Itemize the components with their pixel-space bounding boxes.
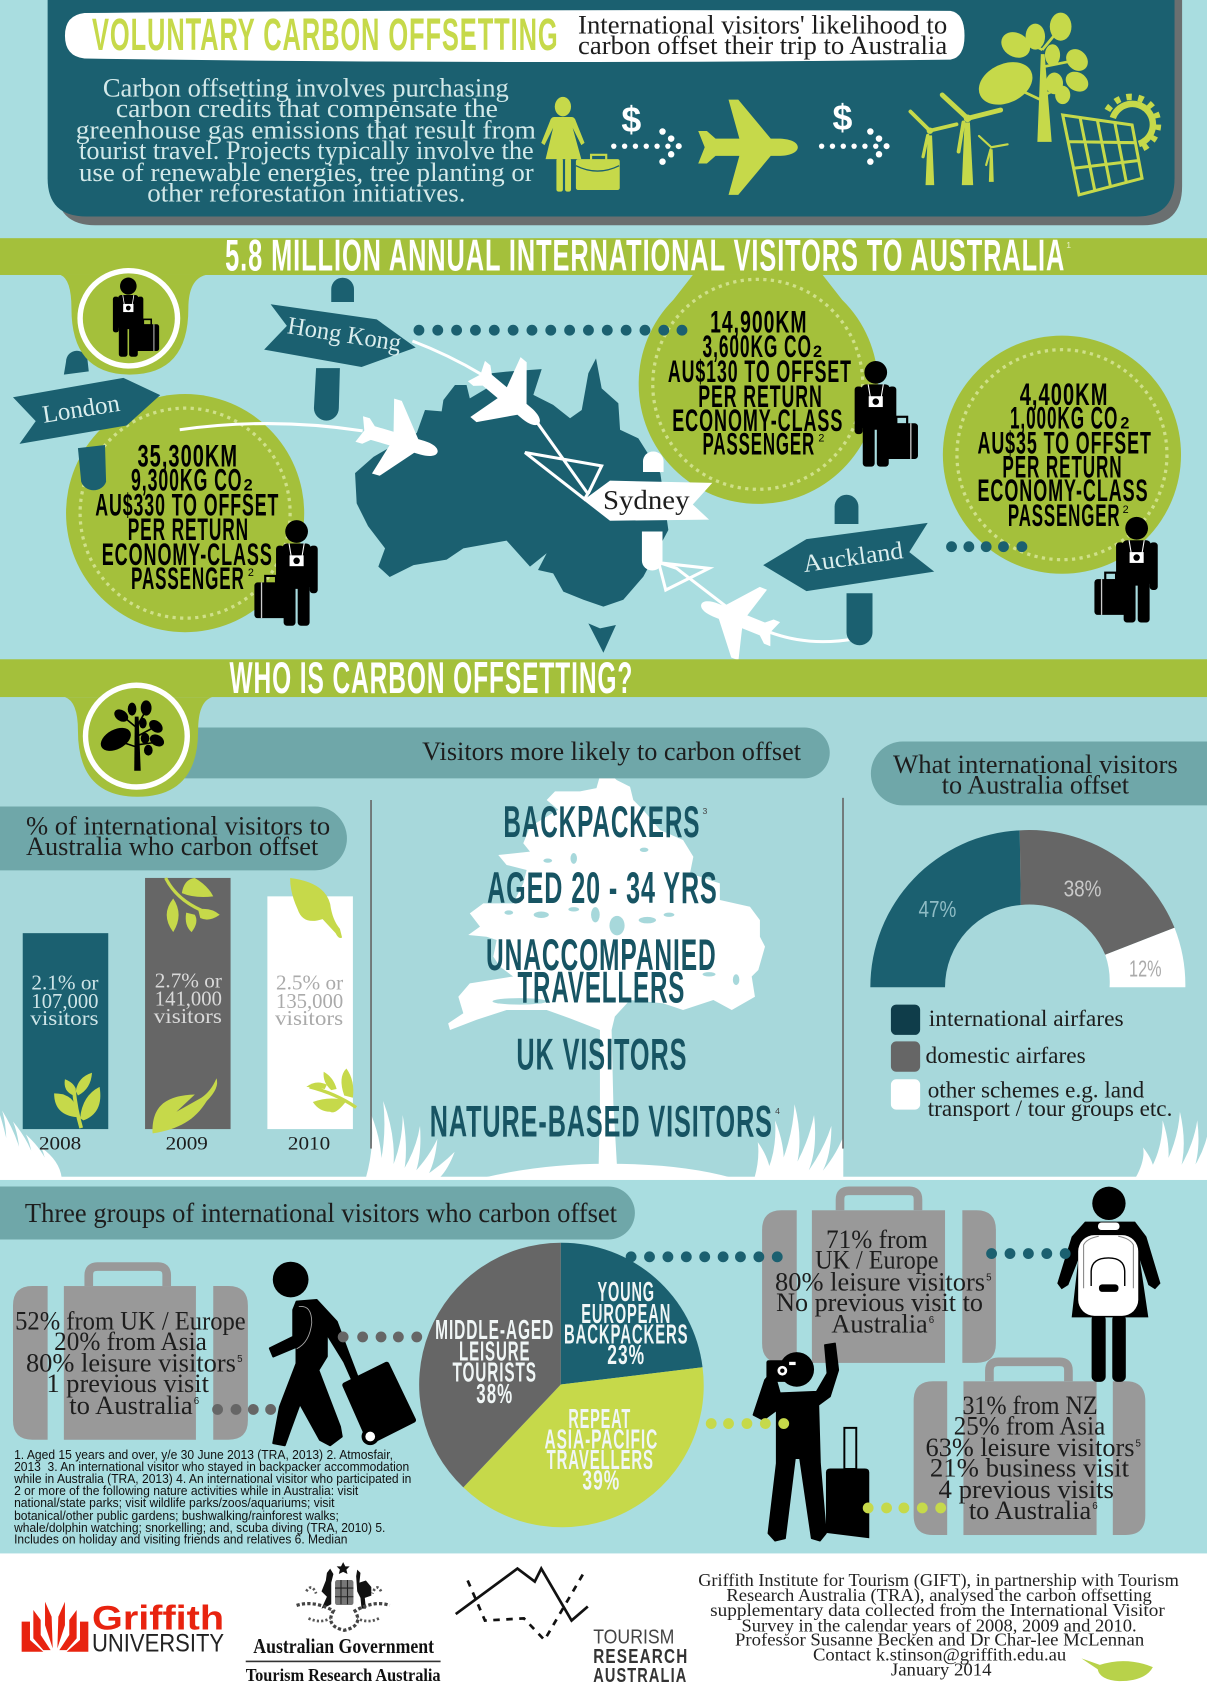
footnotes: botanical/other public gardens; bushwalking/rainforest walks; [14, 1509, 339, 1523]
credits text: Research Australia (TRA), analysed the carbon offsetting [726, 1585, 1152, 1606]
icon: plane [698, 100, 798, 195]
circle: Auckland stats: 1,000KG CO [1010, 401, 1118, 436]
year labels [39, 1134, 330, 1155]
suitcase: young European backpackers: 5 [986, 1273, 992, 1284]
dotted link: Auckland [946, 541, 1027, 552]
circle: Hong Kong stats: 3,600KG CO [703, 329, 812, 364]
footnotes: 2 or more of the following nature activities while in Australia: visit [14, 1484, 359, 1498]
credits text: Griffith Institute for Tourism (GIFT), in partnership with Tourism [698, 1570, 1180, 1591]
heading: who is offsetting: WHO IS CARBON OFFSETTING? [229, 654, 633, 703]
suitcase: repeat Asia-Pacific travellers: 5 [1136, 1438, 1141, 1449]
suitcase: young European backpackers: 71% from [826, 1225, 928, 1254]
circle: London stats: PER RETURN [128, 512, 249, 547]
circle: Auckland stats: 4,400KM [1020, 377, 1108, 412]
donut legend: transport / tour groups etc. [928, 1096, 1172, 1121]
circle: Hong Kong stats: 2 [813, 343, 824, 361]
icon: solar panel [1063, 115, 1142, 195]
suitcase: young European backpackers: 6 [929, 1315, 934, 1326]
pill: what visitors offset: What international visitors [893, 750, 1178, 779]
suitcase: middle-aged leisure tourists: 1 previous visit [47, 1369, 210, 1398]
logo: Australian Government: Australian Government [253, 1636, 434, 1658]
credits text: January 2014 [891, 1660, 992, 1680]
pie chart: three visitor groups: TRAVELLERS [547, 1444, 654, 1475]
suitcase: repeat Asia-Pacific travellers: 6 [1092, 1501, 1098, 1512]
figure: walker with wheeled case [270, 1262, 413, 1445]
pie chart: three visitor groups: MIDDLE-AGED [435, 1314, 554, 1345]
icon: dollar transfer two [819, 98, 890, 165]
semi-donut chart: what is offset: 12% [1129, 955, 1162, 981]
logo: Tourism Research Australia [456, 1569, 688, 1687]
icon: sun [1107, 97, 1158, 149]
year labels: 2010 [288, 1134, 330, 1155]
bar: 2009: visitors [154, 1006, 222, 1028]
bar: 2008: 2.1% or [31, 972, 99, 994]
intro paragraph: carbon credits that compensate the [116, 94, 498, 123]
tourist: Hong Kong [855, 361, 918, 467]
suitcase: middle-aged leisure tourists: 80% leisure visitors [26, 1349, 236, 1378]
circle: Auckland stats: 2 [1120, 415, 1131, 433]
donut legend: international airfares [929, 1006, 1124, 1031]
suitcase: young European backpackers: No previous visit to [776, 1288, 983, 1317]
circle: Hong Kong stats: 14,900KM [710, 304, 808, 339]
credits text: Contact k.stinson@griffith.edu.au [813, 1645, 1066, 1665]
map of Australia [355, 358, 668, 653]
pill: what visitors offset: to Australia offset [942, 771, 1130, 800]
logo: Tourism Research Australia: AUSTRALIA [593, 1664, 687, 1687]
pill: visitors more likely [162, 727, 830, 778]
pie chart: three visitor groups: TOURISTS [452, 1356, 537, 1387]
circle: Hong Kong stats: 2 [818, 433, 826, 445]
footnotes: 1. Aged 15 years and over, y/e 30 June 2013 (TRA, 2013) 2. Atmosfair, [14, 1448, 393, 1462]
list: visitors more likely: UK VISITORS [516, 1031, 687, 1080]
bar: 2008: visitors [30, 1008, 99, 1030]
circle: London stats: PASSENGER [131, 561, 245, 596]
figure: backpacker [1057, 1187, 1160, 1382]
suitcase: young European backpackers [762, 1191, 996, 1363]
pill: percent of visitors: % of international visitors to [26, 812, 330, 841]
circle: London stats: AU$330 TO OFFSET [95, 487, 279, 522]
footnotes [13, 1448, 411, 1547]
circle: Hong Kong stats: ECONOMY-CLASS [672, 403, 843, 438]
credits text: Survey in the calendar years of 2008, 2009 and 2010. [742, 1615, 1137, 1635]
logo: Griffith University: Griffith [92, 1600, 224, 1638]
footnotes: while in Australia (TRA, 2013) 4. An international visitor who participated in [13, 1472, 411, 1486]
intro paragraph: other reforestation initiatives. [147, 178, 465, 207]
pill: three groups: Three groups of international visitors who carbon offset [25, 1198, 617, 1228]
icon: footer leaf [1081, 1658, 1153, 1681]
suitcase: middle-aged leisure tourists: 5 [237, 1354, 242, 1365]
list: visitors more likely: UNACCOMPANIED [486, 931, 717, 980]
signpost: London: London [40, 390, 122, 429]
plane: Auckland route [687, 569, 789, 669]
pill: percent of visitors [0, 806, 347, 870]
logo: Australian Government [246, 1562, 441, 1685]
circle: London stats: 2 [248, 567, 256, 579]
list: visitors more likely: BACKPACKERS [503, 798, 700, 847]
grass tufts [0, 1101, 1207, 1178]
credits text: Professor Susanne Becken and Dr Char-lee McLennan [735, 1629, 1144, 1649]
footnotes: Includes on holiday and visiting friends and relatives 6. Median [14, 1533, 348, 1547]
signpost: Auckland: Auckland [801, 537, 905, 578]
signpost: Hong Kong: Hong Kong [286, 312, 403, 357]
circle: Hong Kong stats: AU$130 TO OFFSET [668, 354, 852, 389]
signpost: Hong Kong [264, 278, 416, 421]
logo: Tourism Research Australia: TOURISM [593, 1625, 674, 1648]
circle: Hong Kong stats: PASSENGER [703, 427, 815, 462]
main title: VOLUNTARY CARBON OFFSETTING [92, 9, 559, 60]
pill: visitors more likely: Visitors more likely to carbon offset [422, 737, 802, 766]
bar: 2010: 2.5% or [276, 972, 343, 994]
icon: lime tree [972, 13, 1092, 142]
circle: Hong Kong stats [639, 275, 878, 504]
list: visitors more likely [430, 798, 782, 1147]
pie chart: three visitor groups: REPEAT [568, 1403, 631, 1434]
circle: London stats: 9,300KG CO [131, 462, 242, 497]
bar: 2009: 2.7% or [155, 970, 222, 992]
banner: annual visitors [0, 232, 1207, 281]
pie chart: three visitor groups: ASIA-PACIFIC [545, 1423, 658, 1454]
donut legend [891, 1005, 1172, 1121]
header pill [65, 10, 965, 62]
logo: Australian Government: Tourism Research Australia [246, 1665, 441, 1685]
white divider [0, 1177, 1207, 1180]
suitcase: young European backpackers: UK / Europe [815, 1246, 939, 1275]
semi-donut chart: what is offset: 38% [1064, 875, 1101, 901]
divider lines [370, 798, 844, 1149]
suitcase: repeat Asia-Pacific travellers: 4 previous visits [939, 1475, 1114, 1504]
suitcase: repeat Asia-Pacific travellers [914, 1362, 1145, 1535]
credits text [698, 1570, 1180, 1680]
icon: crest [297, 1562, 390, 1630]
footnotes: whale/dolphin watching; snorkelling; and, scuba diving (TRA, 2010) 5. [13, 1521, 385, 1535]
pill: percent of visitors: Australia who carbon offset [26, 832, 319, 861]
bar: 2009 [145, 878, 231, 1133]
icon: wind turbines [910, 95, 1008, 185]
credits text: supplementary data collected from the International Visitor [710, 1600, 1165, 1620]
list: visitors more likely: NATURE-BASED VISITORS [430, 1098, 773, 1147]
pill: three groups [0, 1186, 635, 1240]
bar: 2009: 141,000 [155, 989, 222, 1011]
dotted links: group connectors [212, 1248, 1071, 1513]
logo: Tourism Research Australia: RESEARCH [593, 1645, 688, 1668]
suitcase: repeat Asia-Pacific travellers: 21% business visit [930, 1454, 1130, 1483]
list: visitors more likely: 3 [703, 806, 709, 816]
subtitle [578, 11, 948, 60]
suitcase: repeat Asia-Pacific travellers: 63% leisure visitors [926, 1433, 1134, 1462]
icon: dollar transfer one: $ [621, 100, 643, 140]
suitcase: middle-aged leisure tourists: 6 [194, 1396, 199, 1407]
donut legend: domestic airfares [926, 1043, 1086, 1068]
circle: London stats: 35,300KM [137, 439, 238, 474]
figure: photographer with suitcase [753, 1343, 869, 1541]
pie chart: three visitor groups [419, 1243, 704, 1527]
pie chart: three visitor groups: 38% [476, 1378, 513, 1409]
banner: who is offsetting [0, 654, 1207, 703]
signpost: Sydney [583, 451, 712, 570]
bar: 2010: 135,000 [276, 991, 343, 1013]
bar: 2008 [23, 933, 108, 1129]
icon: dollar transfer two: $ [833, 98, 854, 138]
suitcase: young European backpackers: Australia [831, 1310, 928, 1339]
suitcase: middle-aged leisure tourists [13, 1267, 248, 1440]
year labels: 2009 [166, 1134, 208, 1155]
pie chart: three visitor groups: EUROPEAN [581, 1298, 671, 1329]
footer panel [0, 1553, 1207, 1697]
intro paragraph [76, 73, 536, 207]
circle: London stats: 2 [244, 476, 254, 494]
pie chart: three visitor groups: 23% [607, 1339, 645, 1370]
year labels: 2008 [39, 1134, 81, 1155]
circle: London stats [66, 394, 304, 632]
footnotes: 2013 3. An international visitor who stayed in backpacker accommodation [14, 1460, 409, 1474]
semi-donut chart: what is offset [870, 830, 1185, 987]
suitcase: young European backpackers: 80% leisure visitors [775, 1267, 985, 1296]
circle: Auckland stats: 2 [1123, 504, 1130, 516]
bar: 2008: 107,000 [31, 991, 99, 1013]
subtitle: carbon offset their trip to Australia [578, 31, 948, 60]
subtitle: International visitors' likelihood to [578, 11, 947, 40]
intro paragraph: tourist travel. Projects typically involve the [79, 136, 534, 165]
intro paragraph: Carbon offsetting involves purchasing [103, 73, 509, 102]
list: visitors more likely: AGED 20 - 34 YRS [487, 864, 718, 913]
pie chart: three visitor groups: 39% [582, 1465, 620, 1496]
semi-donut chart: what is offset: 47% [919, 896, 956, 922]
suitcase: middle-aged leisure tourists: to Australia [69, 1391, 193, 1420]
logo: Griffith University: UNIVERSITY [92, 1629, 224, 1657]
signpost: London [13, 351, 160, 490]
list: visitors more likely: 4 [775, 1106, 782, 1116]
suitcase: repeat Asia-Pacific travellers: 31% from NZ [962, 1391, 1098, 1420]
tourist: London [254, 520, 318, 626]
list: visitors more likely: TRAVELLERS [517, 963, 685, 1012]
suitcase: middle-aged leisure tourists: 20% from Asia [54, 1327, 207, 1356]
dotted link: Hong Kong [414, 325, 687, 336]
suitcase: repeat Asia-Pacific travellers: 25% from Asia [954, 1411, 1106, 1440]
section tint: who panel [0, 697, 1207, 1178]
pie chart: three visitor groups: LEISURE [459, 1336, 530, 1367]
bar: 2010 [267, 878, 356, 1129]
pie chart: three visitor groups: BACKPACKERS [564, 1318, 688, 1349]
plane: London route [348, 392, 449, 490]
intro paragraph: greenhouse gas emissions that result from [76, 116, 536, 145]
signpost: Auckland [763, 495, 934, 645]
circle: Hong Kong stats: PER RETURN [698, 379, 823, 414]
bar: 2010: visitors [275, 1008, 343, 1030]
badge: tree icon [65, 685, 212, 797]
central white tree [448, 775, 765, 1178]
header panel [48, 0, 1182, 225]
tourist: Auckland [1094, 517, 1158, 622]
logo: Griffith University [22, 1600, 224, 1657]
pie chart: three visitor groups: YOUNG [598, 1276, 655, 1307]
footnote marker: 1 [1066, 240, 1071, 250]
icon: woman with briefcase [541, 97, 620, 192]
signpost: Sydney: Sydney [603, 485, 690, 515]
suitcase: middle-aged leisure tourists: 52% from UK / Europe [15, 1306, 246, 1335]
pill: what visitors offset [871, 742, 1207, 805]
bar chart: visitors offsetting by year [23, 878, 356, 1155]
icon: dollar transfer one [611, 100, 682, 165]
plane: Hong Kong route [451, 341, 564, 453]
footnotes: national/state parks; visit wildlife parks/zoos/aquariums; visit [14, 1496, 335, 1510]
badge: traveller icon [61, 271, 206, 375]
flight paths [180, 341, 855, 642]
intro paragraph: use of renewable energies, tree planting or [79, 158, 534, 187]
suitcase: repeat Asia-Pacific travellers: to Australia [969, 1496, 1092, 1525]
donut legend: other schemes e.g. land [928, 1078, 1145, 1103]
circle: London stats: ECONOMY-CLASS [102, 537, 273, 572]
circle: Auckland stats [943, 336, 1181, 574]
